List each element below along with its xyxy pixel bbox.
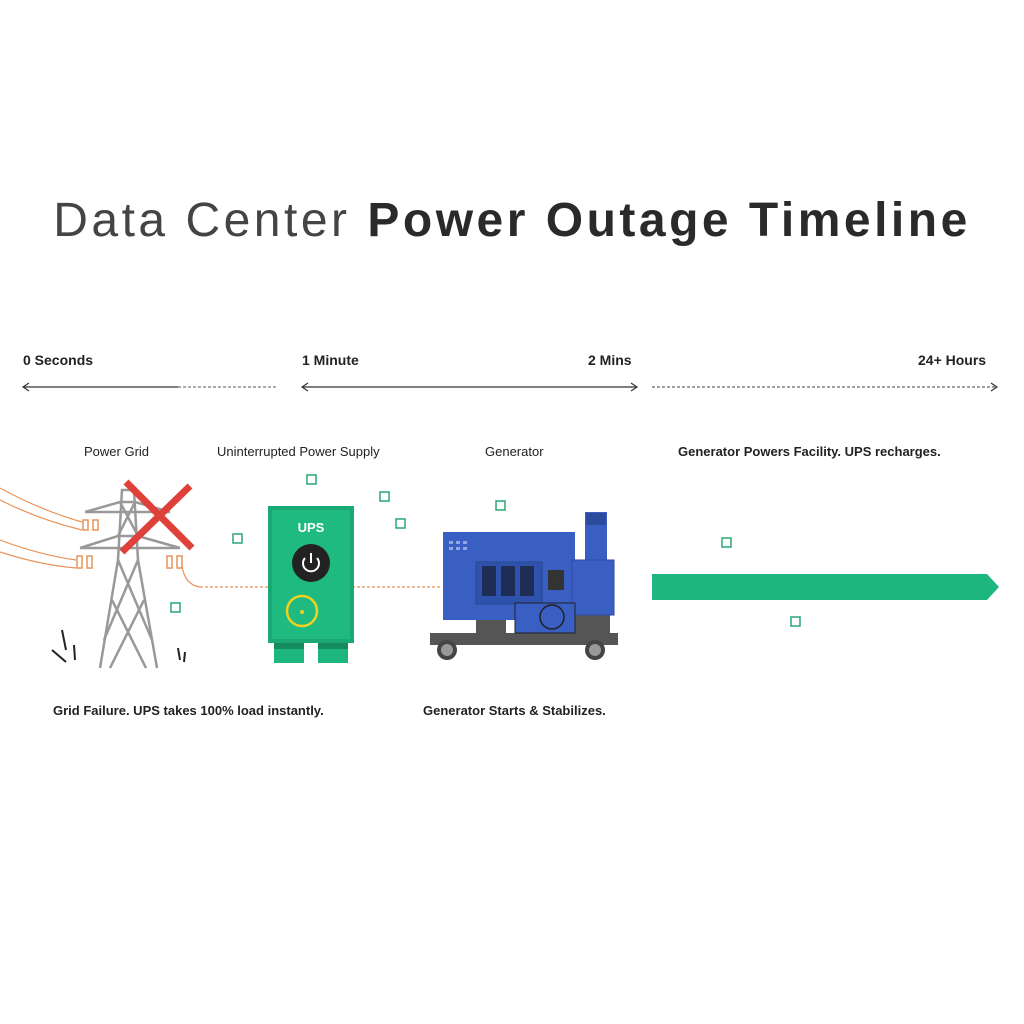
stage labels: Uninterrupted Power Supply bbox=[217, 444, 380, 459]
timeline labels: 0 Seconds bbox=[23, 352, 93, 368]
icon: red X bbox=[122, 482, 192, 552]
icon: power lines bbox=[0, 488, 440, 587]
timeline labels: 1 Minute bbox=[302, 352, 359, 368]
stage labels: Power Grid bbox=[84, 444, 149, 459]
stage labels bbox=[84, 444, 941, 459]
timeline labels: 2 Mins bbox=[588, 352, 632, 368]
stage labels: Generator Powers Facility. UPS recharges. bbox=[678, 444, 941, 459]
bottom captions: Grid Failure. UPS takes 100% load instantly. bbox=[53, 703, 324, 718]
decorative squares bbox=[171, 475, 800, 626]
timeline labels bbox=[23, 352, 986, 368]
bottom captions bbox=[53, 703, 606, 718]
icon: generator bbox=[430, 512, 618, 660]
icon: UPS bbox=[268, 506, 354, 663]
icon: UPS: UPS bbox=[298, 520, 325, 535]
bottom captions: Generator Starts & Stabilizes. bbox=[423, 703, 606, 718]
stage labels: Generator bbox=[485, 444, 544, 459]
green progress arrow bbox=[652, 574, 999, 600]
timeline labels: 24+ Hours bbox=[918, 352, 986, 368]
title: Data Center Power Outage Timeline bbox=[53, 194, 971, 247]
icon: power tower bbox=[80, 490, 180, 668]
